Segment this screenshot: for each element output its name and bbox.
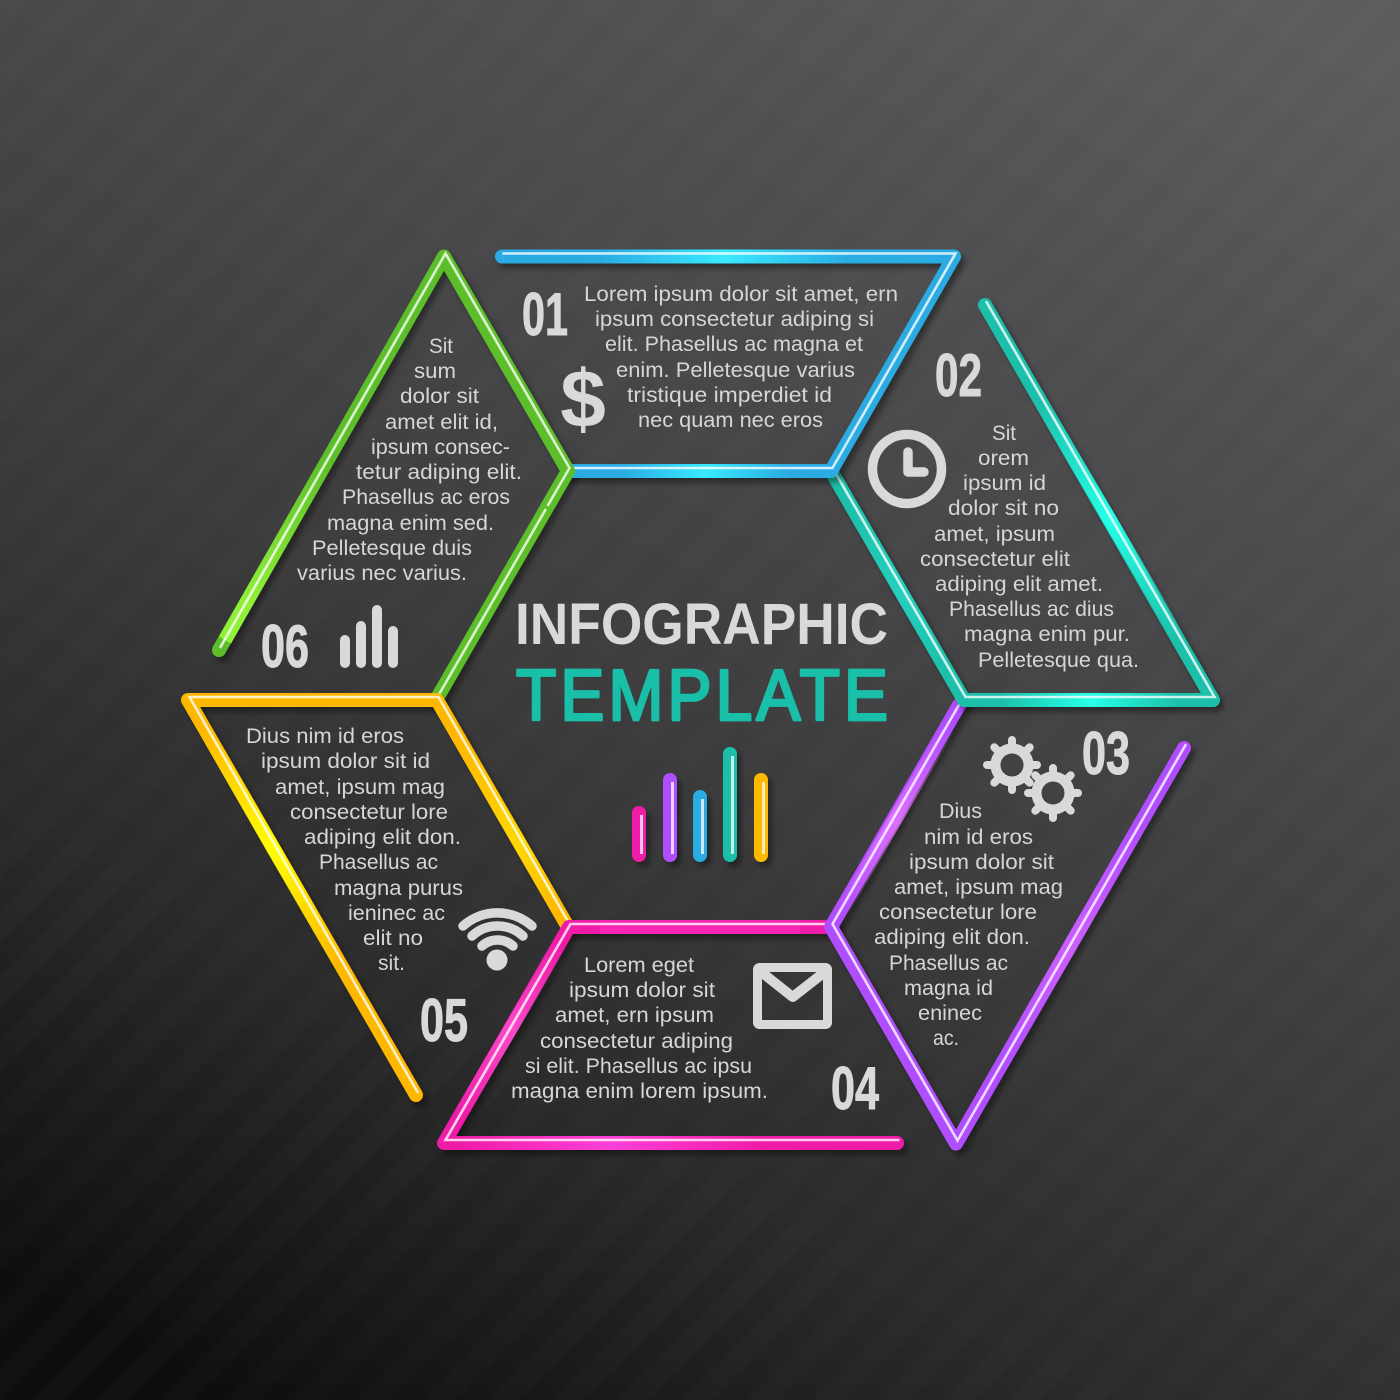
text block 06: varius nec varius. xyxy=(297,562,467,585)
panel 04: magenta xyxy=(444,924,898,1143)
panel 03: purple xyxy=(831,697,1186,1144)
green neon frame xyxy=(219,254,570,700)
number 02: 02 xyxy=(935,342,982,409)
text block 05: elit no xyxy=(363,927,423,950)
text block 01: ipsum consectetur adiping si xyxy=(595,308,874,331)
text block 05: sit. xyxy=(378,952,405,975)
text block 02 xyxy=(920,422,1139,672)
text block 01: Lorem ipsum dolor sit amet, ern xyxy=(584,283,898,306)
magenta neon frame xyxy=(444,924,898,1143)
gear large xyxy=(987,740,1037,790)
panel 05: orange xyxy=(188,697,570,1095)
text block 05: ipsum dolor sit id xyxy=(261,750,430,773)
text block 05: amet, ipsum mag xyxy=(275,776,445,799)
panel 06: green xyxy=(219,254,570,700)
icon: dollar sign: $ xyxy=(560,354,606,445)
number 05: 05 xyxy=(420,987,468,1054)
text block 01: elit. Phasellus ac magna et xyxy=(605,333,863,356)
gear small xyxy=(1028,768,1078,818)
text block 03: ipsum dolor sit xyxy=(909,851,1054,874)
text block 06: magna enim sed. xyxy=(327,512,494,535)
text block 06: ipsum consec- xyxy=(371,436,510,459)
text block 04: consectetur adiping xyxy=(540,1030,733,1053)
text block 06: tetur adiping elit. xyxy=(356,461,522,484)
text block 04: amet, ern ipsum xyxy=(555,1004,714,1027)
text block 01: enim. Pelletesque varius xyxy=(616,359,855,382)
text block 03: Phasellus ac xyxy=(889,952,1008,975)
text block 02: magna enim pur. xyxy=(964,623,1130,646)
text block 03: eninec xyxy=(918,1002,982,1025)
title: TEMPLATE: TEMPLATE xyxy=(516,655,888,736)
text block 01: tristique imperdiet id xyxy=(627,384,832,407)
text block 02: Phasellus ac dius xyxy=(949,598,1114,621)
icon: bar chart xyxy=(340,605,398,668)
number 06: 06 xyxy=(261,613,309,680)
text block 04: ipsum dolor sit xyxy=(569,979,715,1002)
text block 03: Dius xyxy=(939,800,982,823)
text block 03 xyxy=(874,800,1063,1050)
text block 02: ipsum id xyxy=(963,472,1046,495)
panel 02: teal xyxy=(831,302,1214,700)
text block 05: consectetur lore xyxy=(290,801,448,824)
text block 05: ieninec ac xyxy=(348,902,445,925)
text block 02: amet, ipsum xyxy=(934,523,1055,546)
text block 04 xyxy=(511,954,768,1103)
text block 05: Phasellus ac xyxy=(319,851,438,874)
icon: clock xyxy=(872,434,942,504)
text block 04: magna enim lorem ipsum. xyxy=(511,1080,768,1103)
text block 05: Dius nim id eros xyxy=(246,725,404,748)
text block 03: amet, ipsum mag xyxy=(894,876,1063,899)
text block 06: amet elit id, xyxy=(385,411,498,434)
text block 01 xyxy=(584,283,898,432)
orange neon frame xyxy=(188,697,570,1095)
text block 02: Sit xyxy=(992,422,1016,445)
text block 04: si elit. Phasellus ac ipsu xyxy=(525,1055,752,1078)
icon: envelope xyxy=(758,968,828,1024)
text block 06: Pelletesque duis xyxy=(312,537,472,560)
text block 03: nim id eros xyxy=(924,826,1033,849)
text block 03: ac. xyxy=(933,1027,959,1050)
text block 03: magna id xyxy=(904,977,993,1000)
panel 01: blue xyxy=(502,254,956,471)
text block 05 xyxy=(246,725,463,975)
text block 06: sum xyxy=(414,360,456,383)
text block 06: dolor sit xyxy=(400,385,479,408)
icon: wifi xyxy=(463,913,532,970)
purple neon frame xyxy=(831,697,1186,1144)
blue neon frame xyxy=(502,254,956,471)
text block 06: Sit xyxy=(429,335,453,358)
text block 02: consectetur elit xyxy=(920,548,1070,571)
text block 05: adiping elit don. xyxy=(304,826,461,849)
text block 03: adiping elit don. xyxy=(874,926,1030,949)
text block 01: nec quam nec eros xyxy=(638,409,823,432)
text block 04: Lorem eget xyxy=(584,954,694,977)
number 03: 03 xyxy=(1082,720,1130,787)
text block 06: Phasellus ac eros xyxy=(342,486,510,509)
text block 02: Pelletesque qua. xyxy=(978,649,1139,672)
number 01: 01 xyxy=(522,281,568,348)
text block 02: orem xyxy=(978,447,1029,470)
text block 06 xyxy=(297,335,522,585)
text block 02: dolor sit no xyxy=(948,497,1059,520)
text block 03: consectetur lore xyxy=(879,901,1037,924)
title: INFOGRAPHIC: INFOGRAPHIC xyxy=(515,592,888,657)
number 04: 04 xyxy=(831,1055,879,1122)
text block 02: adiping elit amet. xyxy=(935,573,1103,596)
icon: gears xyxy=(987,740,1078,818)
text block 05: magna purus xyxy=(334,877,463,900)
teal neon frame xyxy=(831,302,1214,700)
center bar chart xyxy=(639,754,764,855)
